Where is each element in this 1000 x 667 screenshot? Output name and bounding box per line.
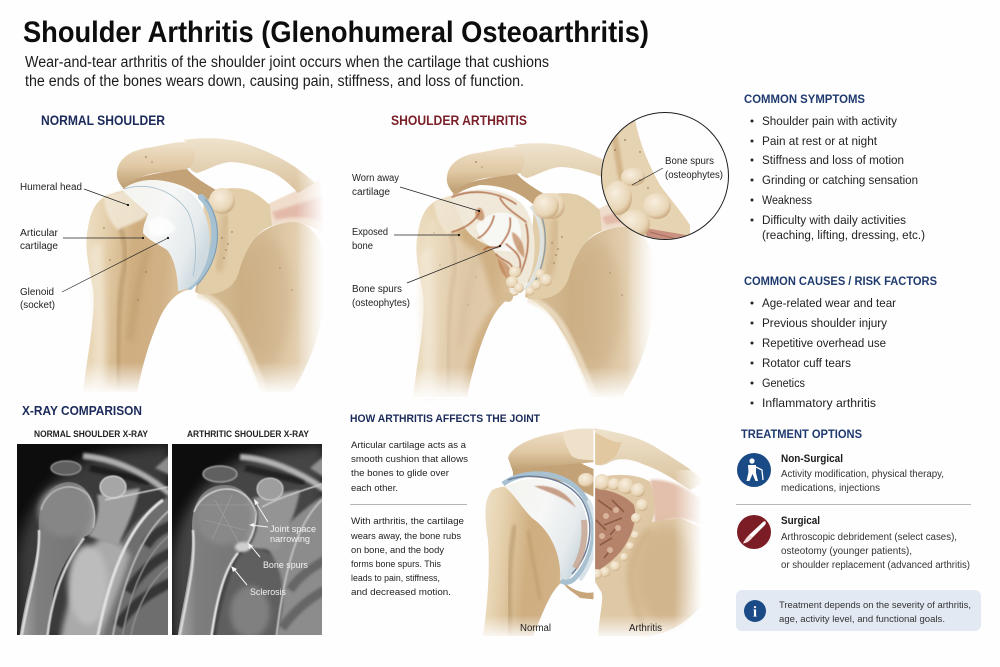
- label: worn away cartilage: [352, 173, 480, 212]
- non-surgical text: Non-Surgical: [781, 453, 843, 465]
- cause list: Previous shoulder injury: [762, 316, 888, 330]
- fade bottom: [478, 615, 718, 640]
- cause list: Rotator cuff tears: [762, 356, 851, 370]
- x-ray: arthritic shoulder: Bone spurs: [263, 560, 308, 571]
- text: healthy cartilage explanation: [351, 440, 468, 494]
- normal half: [483, 429, 600, 636]
- panel: treatment options: [736, 427, 981, 631]
- cause list: Repetitive overhead use: [762, 336, 886, 350]
- text: arthritis explanation: wears away, the bone rubs: [350, 531, 461, 542]
- non-surgical text: [781, 453, 944, 494]
- heading: normal shoulder: NORMAL SHOULDER: [41, 113, 165, 128]
- caption: normal x-ray: NORMAL SHOULDER X-RAY: [34, 429, 148, 439]
- heading: COMMON SYMPTOMS: [744, 92, 865, 106]
- text: arthritis explanation: [350, 516, 464, 598]
- cause list: [750, 296, 896, 410]
- label: articular cartilage: cartilage: [20, 241, 58, 252]
- divider: [594, 430, 595, 600]
- x-ray: arthritic shoulder: [172, 444, 325, 640]
- heading: TREATMENT OPTIONS: [741, 427, 862, 441]
- bones of arthritic shoulder: [400, 143, 661, 400]
- callout: treatment note: Treatment depends on the severity of arthritis,: [779, 600, 971, 611]
- text: arthritis explanation: and decreased motion.: [351, 587, 451, 598]
- non-surgical text: Activity modification, physical therapy,: [781, 469, 944, 480]
- heading: x-ray comparison: X-RAY COMPARISON: [22, 403, 142, 418]
- panel: arthritic shoulder anatomy: [352, 143, 661, 400]
- label: humeral head: [20, 182, 129, 206]
- x-ray: normal shoulder: [17, 444, 172, 640]
- intro text: [25, 54, 549, 90]
- glenoid cartilage: [190, 197, 218, 287]
- label: normal: Normal: [520, 623, 551, 634]
- label: articular cartilage: Articular: [20, 228, 59, 239]
- symptom list: Weakness: [762, 193, 812, 207]
- label: articular cartilage: [20, 228, 144, 252]
- text: healthy cartilage explanation: smooth cushion that allows: [351, 454, 468, 465]
- text: arthritis explanation: forms bone spurs. This: [351, 559, 441, 570]
- heading: shoulder arthritis: SHOULDER ARTHRITIS: [391, 113, 527, 128]
- callout: treatment note: age, activity level, and functional goals.: [779, 614, 945, 625]
- callout: treatment note: i: [753, 604, 757, 620]
- cause list: Inflammatory arthritis: [762, 396, 876, 410]
- panel: common symptoms: [744, 92, 925, 242]
- illustration: normal vs arthritis joint: [483, 428, 700, 636]
- intro text: Wear-and-tear arthritis of the shoulder joint occurs when the cartilage that cushions: [25, 54, 549, 71]
- articular cartilage on humeral head: [122, 180, 210, 291]
- label: humeral head: Humeral head: [20, 182, 82, 193]
- symptom list: Difficulty with daily activities: [762, 213, 906, 227]
- heading: how arthritis affects the joint: HOW ARTHRITIS AFFECTS THE JOINT: [350, 413, 540, 425]
- cause list: Age-related wear and tear: [762, 296, 896, 310]
- non-surgical text: medications, injections: [781, 483, 880, 494]
- label: bone spurs: (osteophytes): [352, 298, 410, 309]
- label: glenoid: [20, 237, 169, 311]
- text: healthy cartilage explanation: each other.: [351, 483, 398, 494]
- icon: walking person with cane: [737, 453, 771, 487]
- panel: causes and risk factors: [744, 274, 937, 410]
- inset: magnified bone spurs: Bone spurs: [665, 156, 714, 167]
- x-ray: arthritic shoulder: Joint space: [270, 524, 316, 535]
- surgical text: Arthroscopic debridement (select cases),: [781, 532, 957, 543]
- label: glenoid: (socket): [20, 300, 55, 311]
- arthritis half: [592, 428, 706, 636]
- bones of normal shoulder: [83, 138, 328, 392]
- label: glenoid: Glenoid: [20, 287, 54, 298]
- callout: treatment note: [736, 590, 981, 631]
- text: arthritis explanation: With arthritis, the cartilage: [351, 516, 464, 527]
- label: worn away cartilage: cartilage: [352, 187, 390, 198]
- label: exposed bone: [352, 227, 460, 252]
- inset: magnified bone spurs: (osteophytes): [665, 170, 723, 181]
- text: arthritis explanation: on bone, and the body: [351, 545, 444, 556]
- label: bone spurs: [352, 245, 501, 309]
- symptom list: Stiffness and loss of motion: [762, 153, 904, 167]
- symptom list: Grinding or catching sensation: [762, 173, 918, 187]
- symptom list: Shoulder pain with activity: [762, 114, 898, 128]
- label: exposed bone: Exposed: [352, 227, 388, 238]
- label: arthritis: Arthritis: [629, 623, 662, 634]
- x-ray: arthritic shoulder: Sclerosis: [250, 587, 286, 598]
- label: exposed bone: bone: [352, 241, 373, 252]
- heading: COMMON CAUSES / RISK FACTORS: [744, 274, 937, 288]
- panel: normal shoulder anatomy: [20, 138, 331, 395]
- surgical text: [781, 515, 970, 571]
- inset: magnified bone spurs: [601, 112, 729, 240]
- text: healthy cartilage explanation: the bones to glide over: [351, 468, 450, 479]
- intro text: the ends of the bones wears down, causing pain, stiffness, and loss of function.: [25, 73, 524, 90]
- label: worn away cartilage: Worn away: [352, 173, 399, 184]
- caption: arthritic x-ray: ARTHRITIC SHOULDER X-RAY: [187, 429, 309, 439]
- symptom list: [750, 114, 925, 242]
- x-ray: arthritic shoulder: narrowing: [270, 534, 310, 545]
- surgical text: Surgical: [781, 515, 820, 527]
- symptom list: Pain at rest or at night: [762, 134, 878, 148]
- text: healthy cartilage explanation: Articular cartilage acts as a: [351, 440, 467, 451]
- cause list: Genetics: [762, 376, 805, 390]
- text: arthritis explanation: leads to pain, stiffness,: [351, 573, 440, 584]
- surgical text: or shoulder replacement (advanced arthritis): [781, 560, 970, 571]
- label: bone spurs: Bone spurs: [352, 284, 402, 295]
- damaged humeral head: [450, 189, 535, 302]
- symptom list: (reaching, lifting, dressing, etc.): [762, 228, 925, 242]
- icon: scalpel: [737, 515, 771, 549]
- surgical text: osteotomy (younger patients),: [781, 546, 912, 557]
- title: Shoulder Arthritis (Glenohumeral Osteoarthritis): [23, 16, 649, 49]
- glenoid with spurs: [525, 193, 559, 296]
